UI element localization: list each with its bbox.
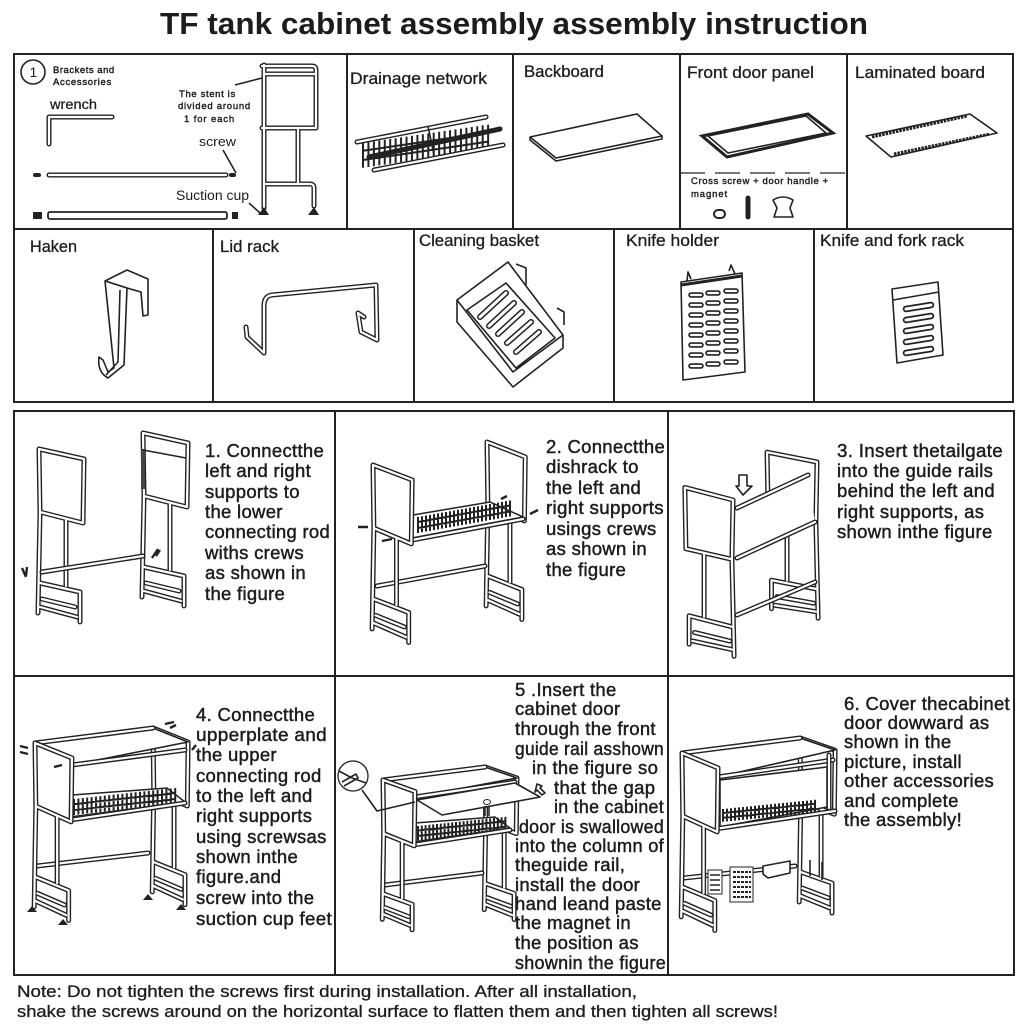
text: step 5: shownin the figure — [515, 952, 666, 973]
text: step 5: 5 .Insert the — [515, 679, 617, 700]
text: step 4: suction cup feet — [196, 908, 332, 929]
text: step 2: dishrack to — [546, 456, 639, 477]
text: step 6: shown in the — [844, 731, 951, 752]
text: step 5: the magnet in — [515, 912, 631, 933]
divider: dashed — [680, 172, 847, 174]
panel: parts inventory grid — [14, 54, 1013, 402]
label: drainage network: Drainage network — [350, 70, 488, 88]
icon: magnet — [714, 210, 725, 218]
panel: step 6 — [681, 693, 1010, 931]
title: TF tank cabinet assembly assembly instruction — [160, 6, 868, 41]
text: step 4: to the left and — [196, 785, 313, 806]
panel: lid rack — [220, 238, 377, 353]
text: step 1: as shown in — [205, 562, 306, 583]
text: step 3: 3. Insert thetailgate — [837, 440, 1003, 461]
text: step 4: the upper — [196, 744, 277, 765]
label: hardware list: magnet — [691, 189, 728, 200]
label: backboard: Backboard — [524, 63, 604, 81]
text: step 6: door dowward as — [844, 712, 989, 733]
text: step 2: the left and — [546, 477, 641, 498]
text: step 4: upperplate and — [196, 724, 327, 745]
heading: brackets and accessories: Accessories — [53, 77, 111, 88]
icon: door handle — [773, 197, 793, 217]
note: Note: Do not tighten the screws first during installation. After all installation, — [17, 983, 637, 1001]
text: step 6: the assembly! — [844, 809, 962, 830]
text: step 1: the lower — [205, 501, 283, 522]
text: step 1: left and right — [205, 460, 311, 481]
panel: assembly steps grid — [14, 411, 1014, 975]
label: knife holder: Knife holder — [626, 232, 720, 250]
panel: step 1 — [22, 433, 330, 622]
panel: step 2 — [358, 436, 665, 643]
text: step 4: 4. Connectthe — [196, 704, 315, 725]
text: step 5: in the figure so — [532, 757, 658, 778]
text: step 5: through the front — [515, 718, 656, 739]
panel: knife and fork rack — [820, 232, 965, 363]
icon: backboard plate — [530, 114, 662, 161]
drawing: assembled stand side — [223, 65, 319, 215]
label: knife and fork rack: Knife and fork rack — [820, 232, 965, 250]
text: step 6: other accessories — [844, 770, 994, 791]
panel: knife holder — [626, 232, 745, 380]
icon: thin connecting rod with screws — [33, 173, 236, 177]
label: lid rack: Lid rack — [220, 238, 280, 256]
label: stent note: 1 for each — [184, 114, 234, 125]
label: screw: screw — [199, 134, 237, 149]
text: step 6: and complete — [844, 790, 959, 811]
drawing: step 4 frame with upper plate — [20, 722, 196, 925]
text: step 1: connecting rod — [205, 521, 330, 542]
text: step 5: into the column of — [515, 835, 665, 856]
panel: brackets and accessories — [21, 60, 319, 219]
panel: front door panel — [680, 64, 847, 218]
panel: drainage network — [350, 70, 503, 170]
label: laminated board: Laminated board — [855, 64, 985, 82]
label: stent note: divided around — [178, 101, 250, 112]
text: step 4: shown inthe — [196, 846, 298, 867]
heading: brackets and accessories: Brackets and — [53, 65, 114, 76]
text: step 6: picture, install — [844, 751, 962, 772]
label: hardware list: Cross screw + door handle + — [691, 176, 829, 187]
text: step 2: as shown in — [546, 538, 647, 559]
drawing: step 2 frame with dish rack — [358, 442, 538, 643]
text: step 2: usings crews — [546, 518, 657, 539]
icon: knife holder — [681, 265, 745, 380]
text: step 5: hand leand paste — [515, 893, 662, 914]
icon: knife and fork rack — [892, 282, 943, 363]
panel: cleaning basket — [419, 232, 564, 387]
panel: step 4 — [20, 704, 332, 929]
text: step 5: door is swallowed — [519, 816, 664, 837]
text: step 2: 2. Connectthe — [546, 436, 665, 457]
icon: lid rack — [246, 285, 377, 353]
text: step 4: screw into the — [196, 887, 314, 908]
icon: numbered circle: 1 — [30, 64, 38, 80]
icon: dish drainage rack — [357, 117, 503, 170]
icon: laminated board — [866, 114, 997, 157]
text: step 5: theguide rail, — [515, 854, 625, 875]
panel: haken — [30, 238, 148, 378]
drawing: step 6 completed cabinet — [681, 738, 835, 931]
text: step 6: 6. Cover thecabinet — [844, 693, 1010, 714]
drawing: step 1 supports and rod — [22, 433, 188, 622]
drawing: step 5 frame with cabinet door — [382, 767, 545, 930]
text: step 4: right supports — [196, 805, 312, 826]
label: cleaning basket: Cleaning basket — [419, 232, 539, 250]
icon: cleaning basket — [457, 262, 564, 387]
text: step 1: 1. Connectthe — [205, 440, 324, 461]
icon: wrench — [49, 117, 112, 144]
text: step 4: using screwsas — [196, 826, 327, 847]
text: step 3: behind the left and — [837, 480, 995, 501]
icon: hook — [99, 270, 148, 378]
text: step 3: shown inthe figure — [837, 521, 993, 542]
label: haken: Haken — [30, 238, 77, 256]
text: step 5: that the gap — [554, 777, 655, 798]
panel: step 5 — [338, 679, 666, 973]
text: step 5: cabinet door — [515, 698, 620, 719]
text: step 5: install the door — [515, 874, 640, 895]
text: step 3: into the guide rails — [837, 460, 993, 481]
note: shake the screws around on the horizontal surface to flatten them and then tighten all screws! — [17, 1003, 778, 1021]
icon: cross screw — [746, 198, 750, 217]
icon: numbered circle — [21, 60, 45, 84]
text: step 3: right supports, as — [837, 501, 984, 522]
text: step 1: the figure — [205, 583, 285, 604]
text: step 1: withs crews — [204, 542, 304, 563]
text: step 1: supports to — [205, 481, 300, 502]
text: step 5: guide rail asshown — [515, 738, 664, 759]
icon: door panel — [702, 114, 833, 157]
label: stent note: The stent is — [179, 89, 235, 100]
panel: laminated board — [855, 64, 997, 157]
label: suction cup: Suction cup — [176, 188, 249, 203]
text: step 5: in the cabinet — [554, 796, 664, 817]
panel: step 3 — [685, 440, 1003, 665]
text: step 4: figure.and — [196, 866, 281, 887]
panel: backboard — [524, 63, 662, 161]
label: front door panel: Front door panel — [687, 64, 814, 82]
label: wrench: wrench — [49, 97, 97, 112]
drawing: step 3 frame with tailgate — [685, 443, 818, 665]
detail callout: guide rail inset — [338, 761, 415, 811]
text: step 4: connecting rod — [196, 765, 322, 786]
icon: thick connecting rod with suction cups — [33, 212, 238, 219]
text: step 2: the figure — [546, 559, 626, 580]
text: step 5: the position as — [515, 932, 639, 953]
text: step 2: right supports — [546, 497, 664, 518]
